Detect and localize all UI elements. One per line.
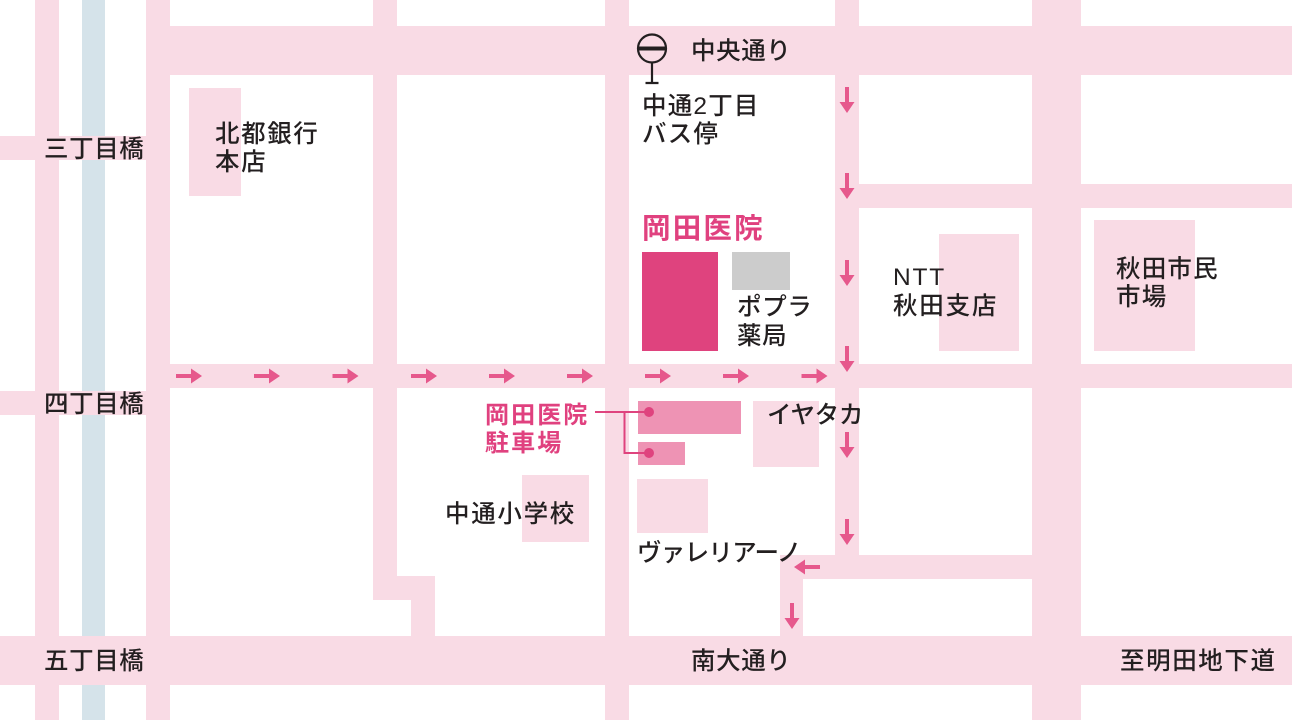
bus stop label: バス停 xyxy=(642,120,719,148)
bank label: 北都銀行 xyxy=(215,121,319,148)
pharmacy label: 薬局 xyxy=(737,322,787,350)
pharmacy label: ポプラ xyxy=(737,294,812,321)
school label: 中通小学校 xyxy=(445,500,576,528)
pharmacy building xyxy=(732,252,790,290)
street label: 南大通り: 南大通り xyxy=(691,647,791,675)
one-way arrows: east xyxy=(176,368,828,384)
underpass label: 至明田地下道 xyxy=(1120,647,1277,675)
one-way arrow: west xyxy=(794,560,820,574)
street label: 中央通り: 中央通り xyxy=(691,37,791,65)
parking label: 駐車場 xyxy=(485,430,563,457)
bridge label: 三丁目橋: 三丁目橋 xyxy=(44,135,144,163)
market label: 秋田市民 xyxy=(1116,256,1219,283)
buildings xyxy=(189,88,1195,542)
market label: 市場 xyxy=(1116,283,1167,311)
parking label: 岡田医院 xyxy=(485,402,589,429)
building label: ヴァレリアーノ: ヴァレリアーノ xyxy=(637,539,801,567)
river xyxy=(82,0,105,720)
one-way arrows: south xyxy=(784,87,854,629)
hospital parking lots xyxy=(595,401,741,465)
icon: bus stop xyxy=(638,34,666,83)
NTT label: 秋田支店 xyxy=(893,292,998,320)
hospital name: 岡田医院 xyxy=(642,213,765,245)
bank label: 本店 xyxy=(215,148,267,176)
hospital building xyxy=(642,252,718,351)
store label: イヤタカ: イヤタカ xyxy=(767,401,863,429)
bus stop label: 中通2丁目 xyxy=(642,93,760,120)
bridge label: 五丁目橋: 五丁目橋 xyxy=(44,647,144,675)
bridge label: 四丁目橋: 四丁目橋 xyxy=(44,390,144,418)
NTT label: NTT xyxy=(893,264,946,291)
